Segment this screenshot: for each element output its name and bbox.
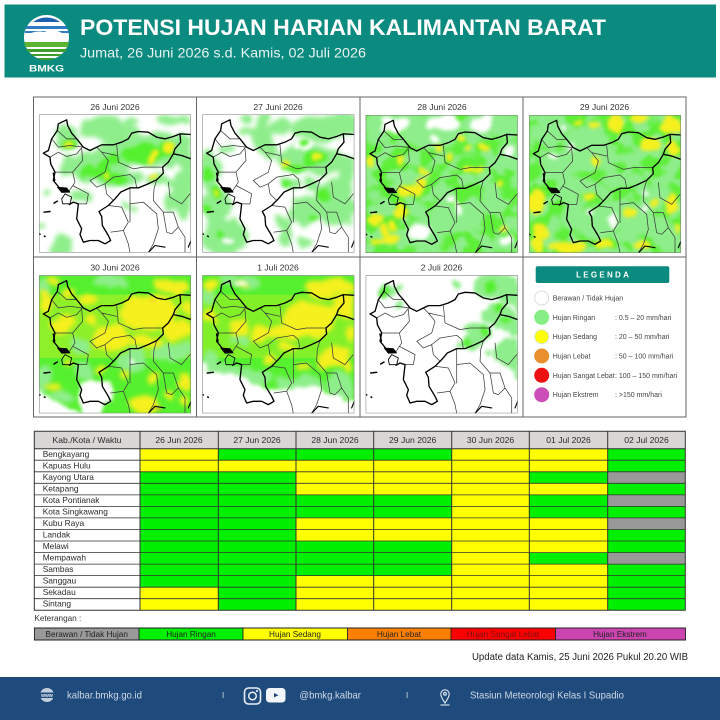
- table row labels: Landak: [43, 530, 71, 540]
- legend item: hujan sangat lebat: Hujan Sangat Lebat: [553, 373, 615, 380]
- legend item: hujan sedang: : 20 – 50 mm/hari: [615, 334, 670, 341]
- map heading: 30 Juni 2026: [90, 262, 140, 272]
- legend item: hujan ringan: [534, 310, 672, 325]
- table header: 30 Jun 2026: [467, 435, 514, 445]
- table row labels: Sanggau: [43, 576, 77, 586]
- footer separator: [406, 692, 408, 698]
- table row labels: Sekadau: [43, 587, 76, 597]
- map: rainfall 26 Juni: [39, 114, 191, 252]
- panel: map grid frame: [34, 97, 686, 417]
- panel: map 27 Juni 2026: [202, 102, 355, 254]
- table row labels: Kapuas Hulu: [43, 460, 91, 470]
- title: POTENSI HUJAN HARIAN KALIMANTAN BARAT: [80, 15, 607, 40]
- footer website: kalbar.bmkg.go.id: [67, 690, 142, 702]
- table row labels: Bengkayang: [43, 449, 90, 459]
- icon: website globe: www: [40, 693, 53, 699]
- table row labels: Kubu Raya: [43, 518, 84, 528]
- footer bar: [0, 677, 720, 720]
- legend item: hujan sangat lebat: [534, 368, 678, 383]
- panel: map 29 Juni 2026: [528, 102, 681, 253]
- legend heading: [536, 266, 669, 283]
- icon: instagram: [244, 688, 260, 704]
- legend item: hujan ekstrem: Hujan Ekstrem: [553, 392, 599, 399]
- map heading: 27 Juni 2026: [253, 102, 303, 112]
- map heading: 2 Juli 2026: [421, 262, 462, 272]
- table header: 27 Jun 2026: [233, 435, 281, 445]
- logo wordmark: BMKG: [29, 64, 64, 74]
- table header: Kab./Kota / Waktu: [53, 435, 122, 445]
- map heading: 29 Juni 2026: [580, 102, 629, 112]
- header banner: [4, 4, 716, 78]
- table row labels: Kota Singkawang: [43, 506, 108, 516]
- table row labels: Kayong Utara: [43, 472, 94, 482]
- map heading: 28 Juni 2026: [417, 102, 467, 112]
- panel: map 30 Juni 2026: [33, 262, 192, 418]
- panel: map 28 Juni 2026: [365, 102, 518, 253]
- legend item: hujan ekstrem: [534, 387, 662, 402]
- keterangan color key: Berawan / Tidak Hujan: [46, 630, 128, 639]
- keterangan color key: Hujan Ringan: [166, 630, 216, 639]
- table header: 01 Jul 2026: [546, 435, 591, 445]
- legend item: hujan ringan: : 0.5 – 20 mm/hari: [615, 315, 672, 322]
- legend item: hujan lebat: [534, 348, 674, 364]
- keterangan color key: Hujan Sedang: [269, 630, 321, 639]
- legend heading: LEGENDA: [576, 271, 629, 280]
- keterangan color key: Hujan Lebat: [377, 630, 422, 639]
- table row labels: Sintang: [43, 598, 71, 608]
- footer social handle: @bmkg.kalbar: [299, 690, 361, 702]
- footer station name: Stasiun Meteorologi Kelas I Supadio: [470, 690, 624, 702]
- panel: legenda: [534, 266, 678, 402]
- legend item: hujan lebat: Hujan Lebat: [553, 354, 591, 360]
- table row labels: Melawi: [43, 541, 69, 551]
- keterangan color key: Hujan Ekstrem: [593, 630, 647, 639]
- keterangan color key: [34, 628, 685, 640]
- map: rainfall 28 Juni: [366, 115, 518, 253]
- legend item: hujan lebat: : 50 – 100 mm/hari: [615, 354, 674, 360]
- update note: Update data Kamis, 25 Juni 2026 Pukul 20.20 WIB: [472, 652, 688, 663]
- table row labels: [43, 449, 108, 608]
- table cells: rain categories: [34, 449, 685, 610]
- legend item: hujan sedang: [535, 330, 670, 344]
- icon: BMKG logo: [24, 15, 69, 74]
- panel: map 1 Juli 2026: [197, 262, 360, 418]
- map: rainfall 29 Juni: [529, 115, 681, 253]
- map heading: 26 Juni 2026: [90, 102, 140, 112]
- table header: 02 Jul 2026: [624, 435, 669, 445]
- legend item: berawan: Berawan / Tidak Hujan: [553, 296, 623, 302]
- panel: map 26 Juni 2026: [39, 102, 192, 253]
- map: rainfall 30 Juni: [39, 275, 191, 414]
- table header: 26 Jun 2026: [155, 435, 203, 445]
- map: rainfall 1 Juli: [202, 275, 354, 414]
- map: rainfall 2 Juli: [366, 275, 518, 414]
- subtitle: Jumat, 26 Juni 2026 s.d. Kamis, 02 Juli 2026: [80, 44, 366, 60]
- legend item: hujan ekstrem: : >150 mm/hari: [615, 392, 662, 399]
- icon: youtube: [266, 688, 286, 702]
- legend item: berawan: [535, 291, 623, 305]
- table row labels: Kota Pontianak: [43, 495, 100, 505]
- table header: [34, 431, 685, 449]
- table row labels: Mempawah: [43, 552, 86, 562]
- table header: 28 Jun 2026: [311, 435, 359, 445]
- map: rainfall 27 Juni: [202, 114, 354, 252]
- table row labels: Sambas: [43, 564, 73, 574]
- panel: map 2 Juli 2026: [366, 262, 519, 413]
- panel: rainfall table: [34, 431, 685, 610]
- legend item: hujan ringan: Hujan Ringan: [553, 315, 595, 322]
- table row labels: Ketapang: [43, 484, 79, 494]
- legend item: hujan sangat lebat: : 100 – 150 mm/hari: [615, 373, 678, 380]
- table header: 29 Jun 2026: [389, 435, 437, 445]
- icon: location pin: [440, 690, 450, 705]
- map heading: 1 Juli 2026: [257, 262, 299, 272]
- keterangan color key: Hujan Sangat Lebat: [467, 630, 540, 639]
- footer separator: [222, 692, 224, 698]
- legend item: hujan sedang: Hujan Sedang: [553, 334, 597, 341]
- keterangan label: Keterangan :: [34, 614, 81, 623]
- icon: website globe: [38, 688, 56, 702]
